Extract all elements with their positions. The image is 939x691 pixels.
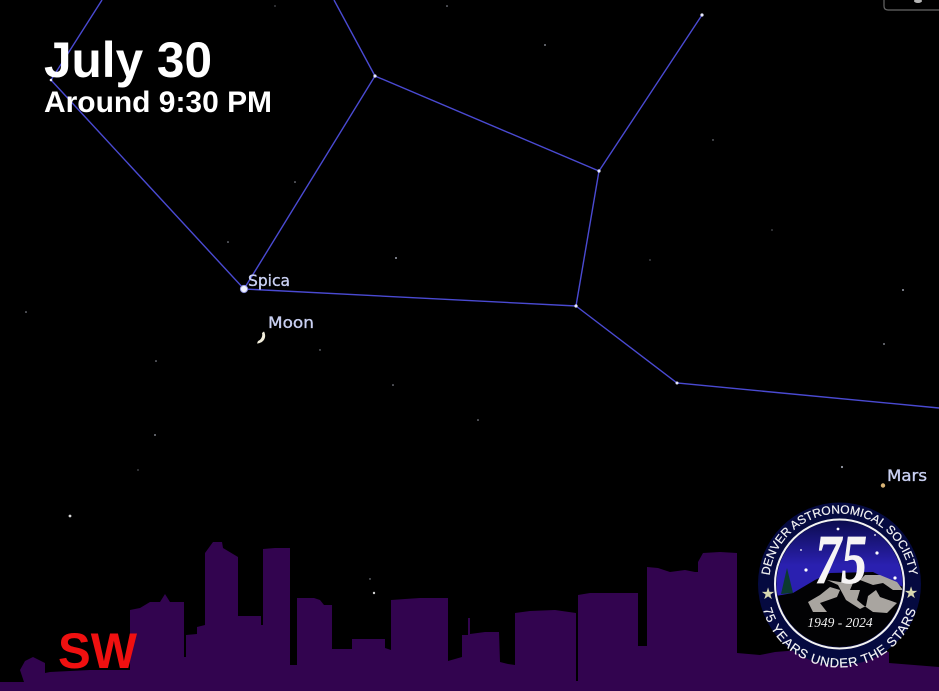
- constellation stars: [50, 13, 704, 385]
- mountain: [778, 572, 902, 647]
- tree: [781, 568, 793, 594]
- snow patches: [808, 575, 903, 613]
- sky stars: [800, 528, 897, 580]
- top-right panel corner: [884, 0, 939, 10]
- icon: crescent moon: [257, 332, 265, 344]
- logo ring text top: DENVER ASTRONOMICAL SOCIETY: [761, 505, 918, 575]
- logo ring text bottom: 75 YEARS UNDER THE STARS: [763, 606, 916, 668]
- label: Mars: Mars: [887, 466, 927, 485]
- city skyline: [0, 542, 939, 691]
- planet: Mars: [881, 483, 885, 488]
- label: Spica: Spica: [248, 271, 290, 290]
- constellation lines: Virgo: [51, 0, 939, 408]
- logo side stars: ★: [761, 584, 775, 603]
- subtitle: Around 9:30 PM: [44, 86, 272, 119]
- star: Spica: [240, 285, 248, 293]
- logo number 75: 75: [815, 522, 867, 599]
- logo: Denver Astronomical Society badge: [758, 502, 921, 668]
- logo years: 1949 - 2024: [807, 615, 873, 630]
- logo side stars: ★: [904, 583, 918, 602]
- background stars: [25, 5, 904, 594]
- title: July 30: [44, 32, 212, 88]
- logo side stars: [761, 583, 918, 603]
- direction label: SW: SW: [58, 623, 138, 679]
- label: Moon: Moon: [268, 313, 314, 332]
